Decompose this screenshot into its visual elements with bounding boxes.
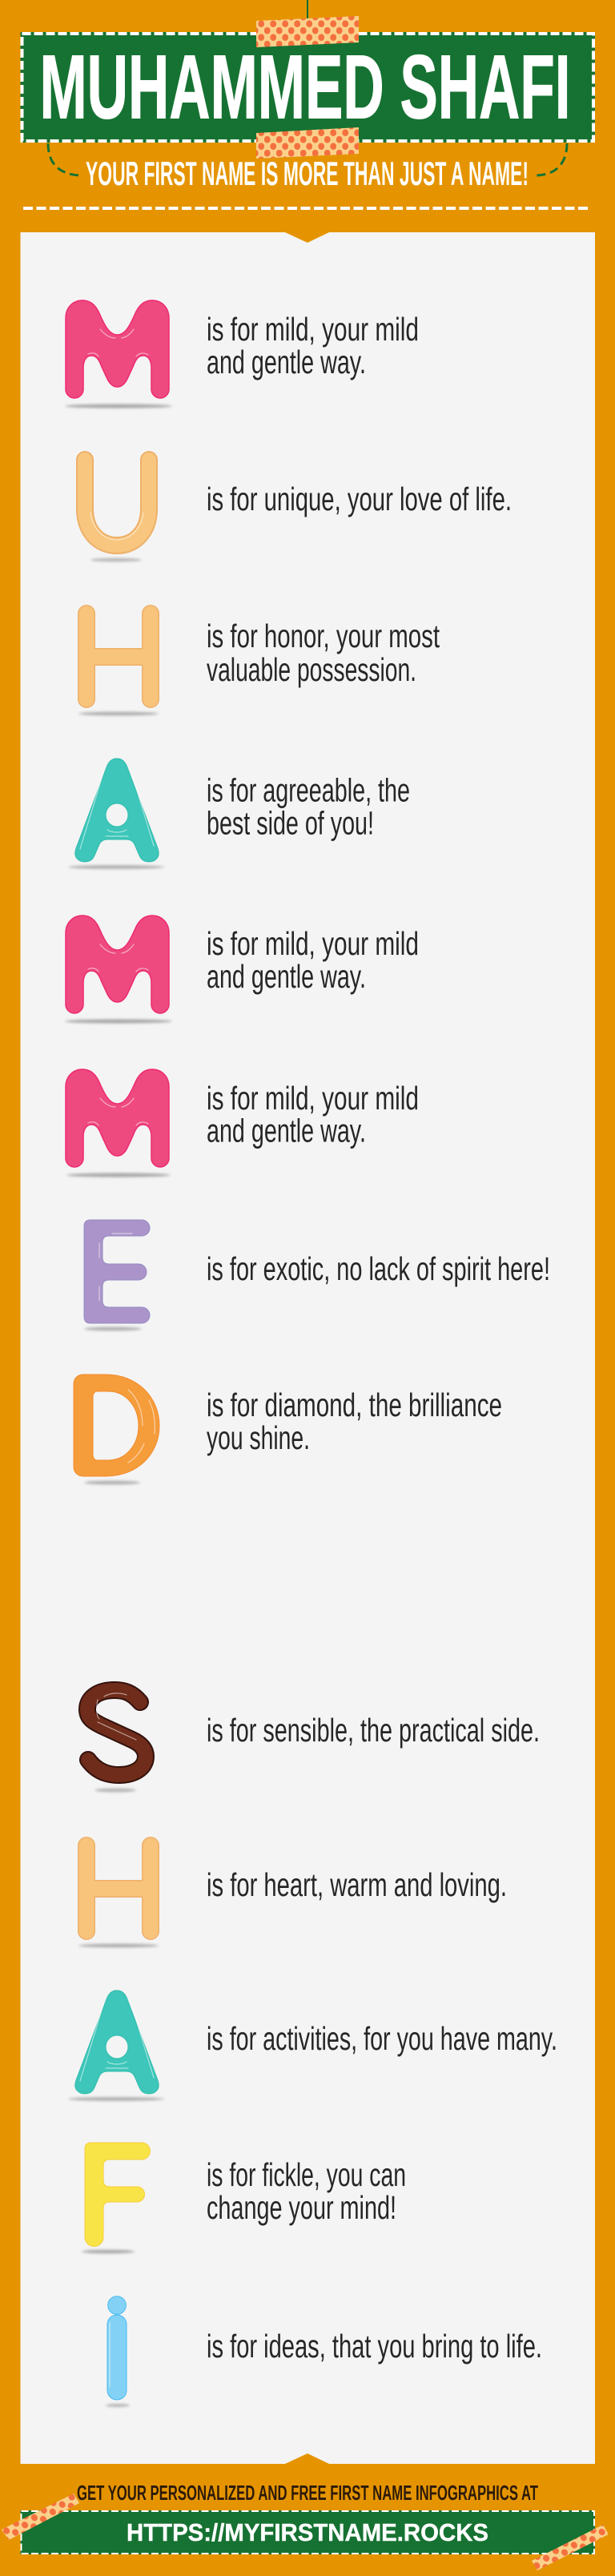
tape: footer right [532,2525,609,2570]
row: H honor [78,614,440,715]
text: mild [207,925,419,995]
text: agreeable: best side of you! [207,805,374,842]
text: mild: and gentle way. [207,958,366,995]
icon: letter A [68,1990,164,2101]
text: diamond [207,1387,502,1456]
row: F fickle [82,2143,406,2253]
text: mild [207,1080,419,1149]
text: honor [207,618,440,688]
tape: footer left [2,2493,79,2540]
text: mild: and gentle way. [207,1113,366,1149]
row: i ideas [106,2296,542,2407]
icon: letter i [106,2296,130,2407]
icon: letter S [87,1690,146,1792]
right dashed connector [535,143,567,175]
text: mild [207,311,419,380]
text: mild: and gentle way. [207,344,366,380]
tape: bottom [256,127,359,159]
row: M mild second [65,916,419,1024]
row: A activities [68,1990,557,2101]
row: H heart [78,1845,507,1947]
row: A agreeable [68,759,410,869]
row: S sensible [87,1690,540,1792]
text: fickle [207,2156,406,2226]
text: agreeable: is for agreeable, the [207,772,410,809]
icon: letter D [74,1375,159,1484]
icon: letter A [68,759,164,869]
icon: letter M [66,1069,171,1177]
row: M mild third [66,1069,419,1177]
left dashed connector [48,143,82,175]
text: honor: valuable possession. [207,651,416,688]
header hanging line [307,0,308,20]
text: mild: is for mild, your mild [207,311,419,348]
icon: letter F [82,2143,150,2253]
text: diamond: is for diamond, the brilliance [207,1387,502,1423]
icon: letter E [84,1220,150,1330]
text: honor: is for honor, your most [207,618,440,654]
icon: letter U [85,460,149,561]
icon: letter H [78,614,159,715]
text: mild: is for mild, your mild [207,925,419,962]
title banner [21,32,595,143]
footer banner [21,2510,595,2554]
footer url: HTTPS://MYFIRSTNAME.ROCKS [127,2519,488,2546]
icon: letter M [65,300,172,409]
dashed divider [23,207,591,210]
icon: letter M [65,916,172,1024]
row: U unique [85,460,512,561]
row: M mild [65,300,419,409]
text: agreeable [207,772,410,842]
text: diamond: you shine. [207,1419,310,1456]
icon: letter H [78,1845,159,1947]
tape: top [256,16,359,47]
text: fickle: is for fickle, you can [207,2156,406,2193]
row: D diamond [74,1375,502,1484]
row: E exotic [84,1220,550,1330]
text: fickle: change your mind! [207,2189,396,2226]
text: mild: is for mild, your mild [207,1080,419,1117]
